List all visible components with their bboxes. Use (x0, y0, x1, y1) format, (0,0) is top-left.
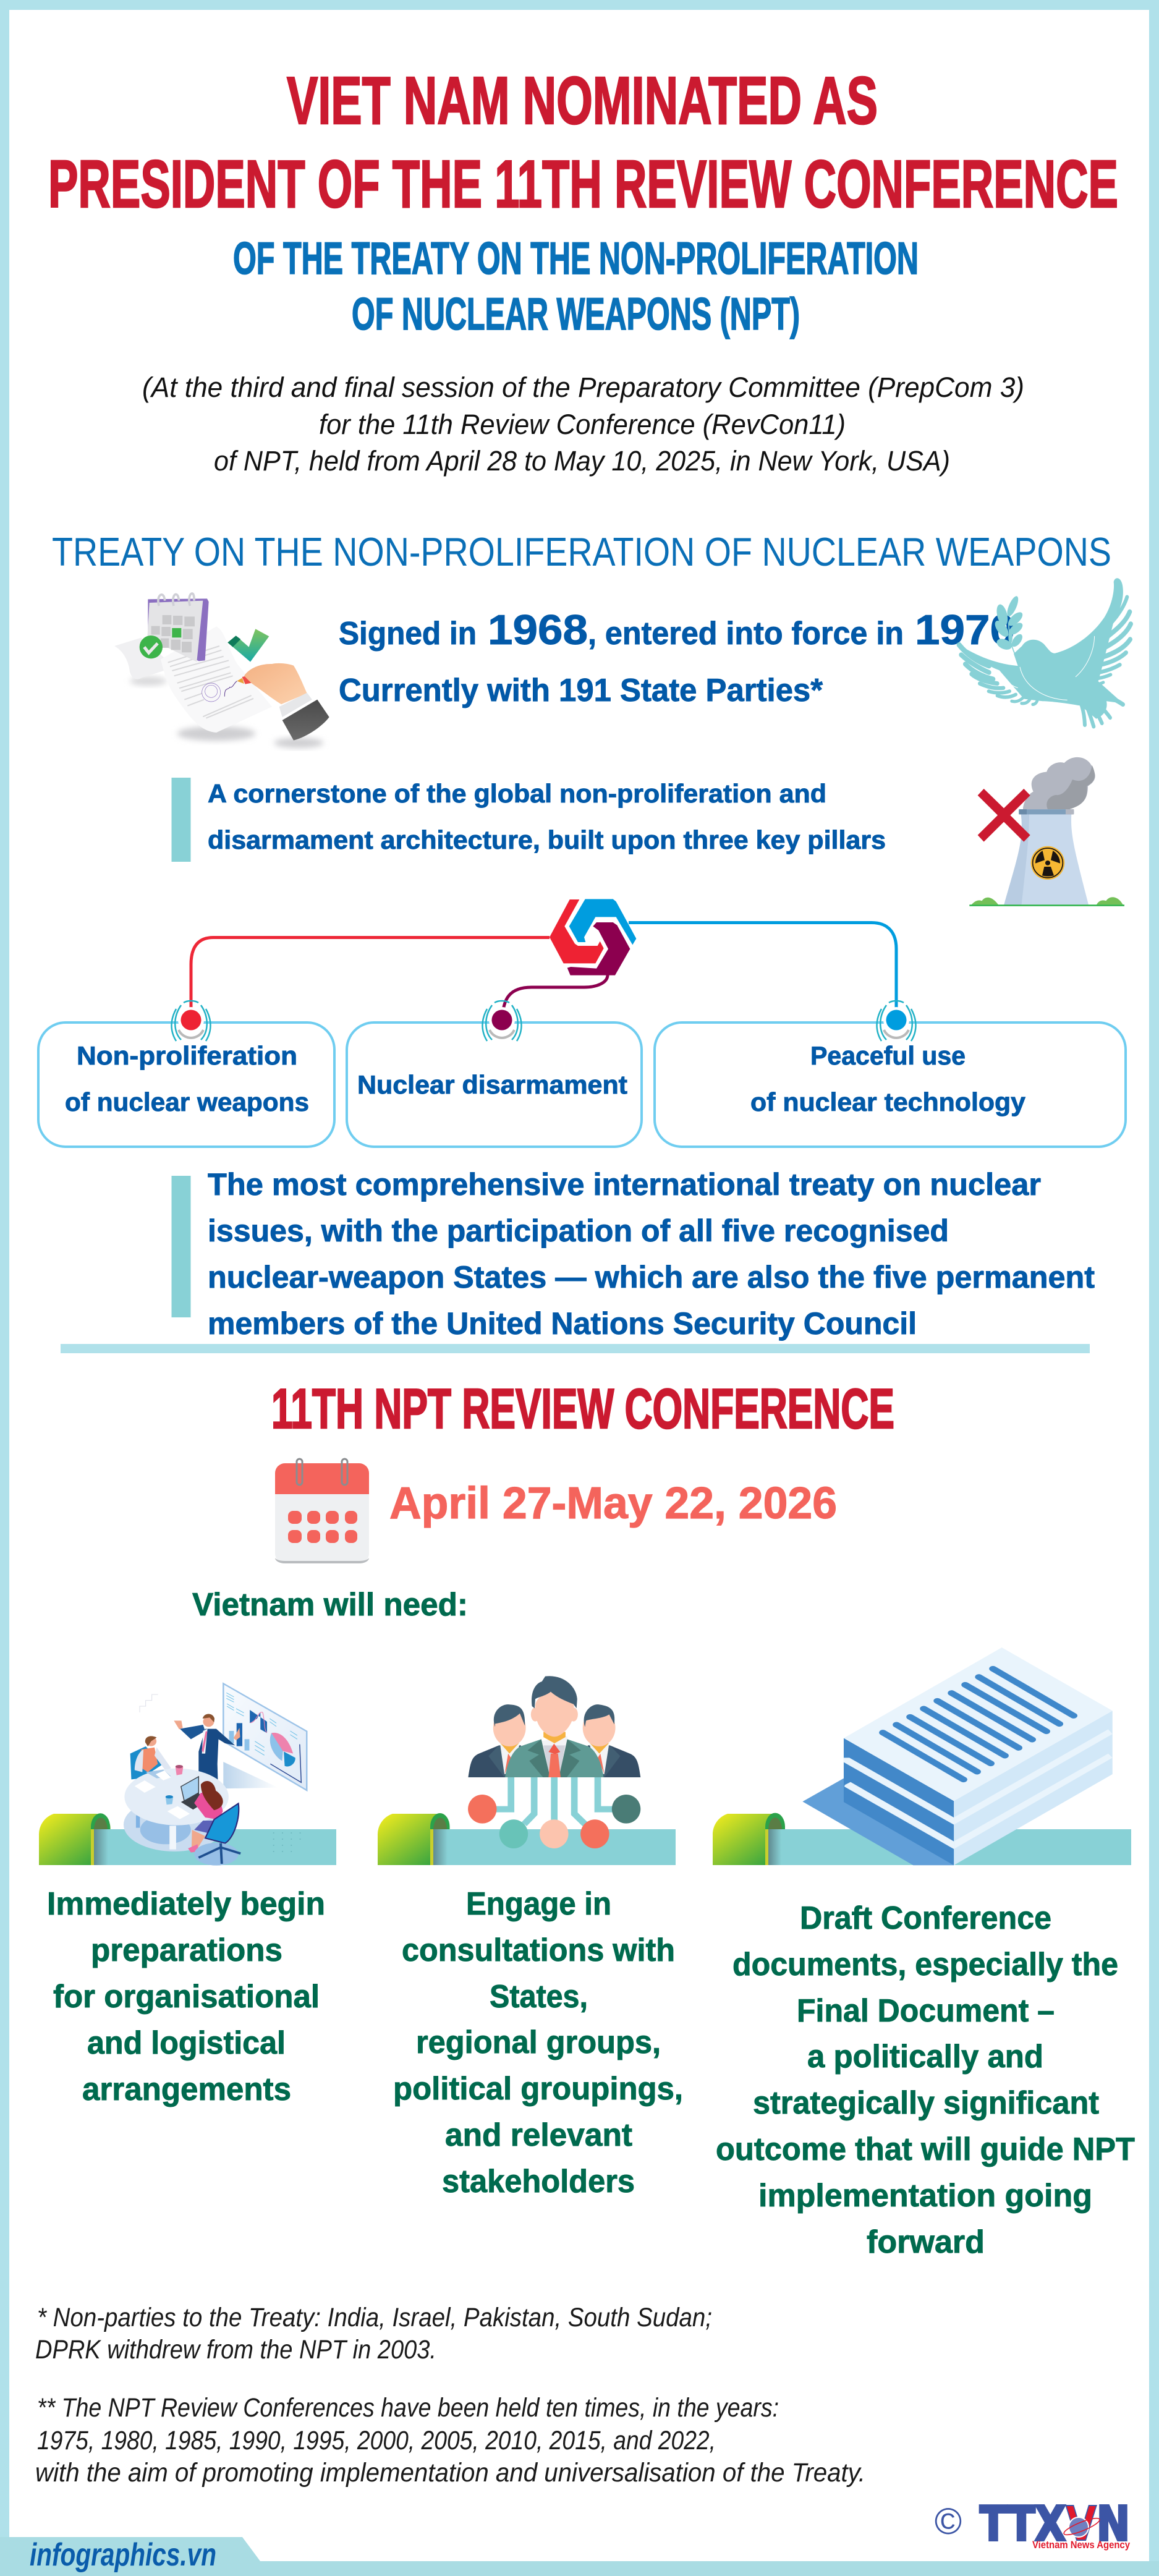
text: draft documents: a politically and (807, 2039, 1043, 2075)
panel: non-proliferation box: of nuclear weapons (65, 1087, 309, 1116)
panel: peaceful use box (655, 1022, 1126, 1147)
text: draft documents: outcome that will guide NPT (716, 2132, 1135, 2167)
footnote: review conferences: 1975, 1980, 1985, 1990, 1995, 2000, 2005, 2010, 2015, and 2022, (37, 2426, 716, 2455)
subheading: Vietnam will need: Vietnam will need: (192, 1587, 468, 1623)
node: blue pillar dot (877, 1001, 916, 1041)
panel: non-proliferation box (38, 1022, 334, 1147)
icon: nuclear cooling tower with red cross (969, 757, 1124, 906)
footnote: review conferences: with the aim of promoting implementation and universalisation of the Treaty. (35, 2458, 865, 2488)
session note (142, 372, 1024, 477)
text: draft documents: forward (867, 2224, 985, 2260)
text: consultations: Engage in (466, 1886, 611, 1922)
text: consultations: stakeholders (442, 2164, 635, 2200)
text: draft documents: Final Document – (797, 1993, 1055, 2029)
text: organisational arrangements: for organisational (53, 1979, 320, 2015)
banner: column 3 (713, 1813, 1131, 1865)
treaty dates text (339, 606, 1015, 708)
cornerstone callout: A cornerstone of the global non-proliferation and (208, 779, 826, 808)
icon: stakeholders network (468, 1676, 640, 1848)
session note: (At the third and final session of the Preparatory Committee (PrepCom 3) (142, 372, 1024, 403)
footnote: review conferences: ** The NPT Review Conferences have been held ten times, in the years: (37, 2393, 779, 2423)
text: consultations: States, (490, 1979, 588, 2015)
footnote: non-parties: DPRK withdrew from the NPT in 2003. (35, 2335, 436, 2365)
icon: team meeting around table (124, 1683, 307, 1866)
cornerstone callout (172, 778, 886, 862)
logo: TTXVN Vietnam News Agency: Vietnam News Agency (1032, 2539, 1130, 2551)
node: purple pillar dot (482, 1001, 522, 1041)
title (48, 63, 1118, 222)
text: draft documents: strategically significant (753, 2085, 1099, 2121)
cornerstone callout: disarmament architecture, built upon three key pillars (208, 825, 886, 854)
comprehensive treaty callout (172, 1167, 1095, 1341)
panel: nuclear disarmament box: Nuclear disarmament (357, 1070, 627, 1099)
comprehensive treaty callout: The most comprehensive international treaty on nuclear (208, 1167, 1041, 1202)
text: consultations: and relevant (445, 2117, 632, 2153)
footer tab: infographics.vn: infographics.vn (30, 2537, 216, 2573)
text: draft documents: Draft Conference (800, 1900, 1051, 1936)
text: organisational arrangements: and logistical (87, 2025, 286, 2061)
text: consultations: regional groups, (416, 2025, 661, 2060)
footnote: non-parties (35, 2303, 712, 2365)
treaty dates text: Currently with 191 State Parties* (339, 673, 823, 708)
conference date: April 27-May 22, 2026 (389, 1479, 837, 1528)
panel: peaceful use box: of nuclear technology (750, 1087, 1026, 1116)
treaty dates text: , entered into force in (588, 616, 904, 652)
banner: column 2 (378, 1813, 676, 1865)
pillars connector lines (191, 922, 896, 1020)
text: draft documents (716, 1900, 1135, 2260)
footnote: review conferences (35, 2393, 865, 2488)
node: red pillar dot (172, 1001, 210, 1041)
icon: hexagon logo of three pillars (550, 899, 636, 976)
icon: peace dove (956, 578, 1131, 726)
logo: TTXVN Vietnam News Agency: TTXVN (980, 2497, 1130, 2552)
panel: peaceful use box: Peaceful use (810, 1041, 966, 1070)
title: VIET NAM NOMINATED AS (287, 63, 878, 138)
text: consultations: consultations with (402, 1932, 675, 1968)
subtitle: OF NUCLEAR WEAPONS (NPT) (352, 289, 800, 339)
treaty dates text: 1970 (915, 606, 1015, 653)
treaty dates text: Signed in (339, 616, 477, 652)
comprehensive treaty callout: issues, with the participation of all five recognised (208, 1214, 949, 1248)
icon: calendar (275, 1459, 369, 1563)
subtitle (233, 234, 919, 339)
panel: non-proliferation box: Non-proliferation (77, 1041, 297, 1070)
session note: for the 11th Review Conference (RevCon11) (319, 409, 846, 440)
text: organisational arrangements: Immediately begin (47, 1886, 325, 1922)
icon: signing document (114, 593, 329, 748)
treaty dates text: 1968 (488, 606, 588, 653)
text: draft documents: implementation going (758, 2178, 1092, 2214)
comprehensive treaty callout: nuclear-weapon States — which are also the five permanent (208, 1260, 1095, 1294)
panel: nuclear disarmament box (347, 1022, 642, 1147)
section heading: 11th NPT Review Conference: 11TH NPT REVIEW CONFERENCE (271, 1378, 894, 1440)
text: organisational arrangements: preparations (91, 1932, 282, 1968)
comprehensive treaty callout: members of the United Nations Security Council (208, 1306, 917, 1341)
footnote: non-parties: * Non-parties to the Treaty: India, Israel, Pakistan, South Sudan; (37, 2303, 712, 2332)
text: organisational arrangements (47, 1886, 325, 2107)
text: consultations (393, 1886, 683, 2200)
text: organisational arrangements: arrangements (82, 2072, 291, 2107)
text: consultations: political groupings, (393, 2071, 683, 2107)
text: draft documents: documents, especially the (732, 1947, 1118, 1983)
session note: of NPT, held from April 28 to May 10, 2025, in New York, USA) (214, 445, 950, 477)
logo: TTXVN Vietnam News Agency: © (935, 2501, 962, 2542)
banner: column 1 (39, 1813, 336, 1865)
icon: stack of documents (802, 1647, 1113, 1865)
